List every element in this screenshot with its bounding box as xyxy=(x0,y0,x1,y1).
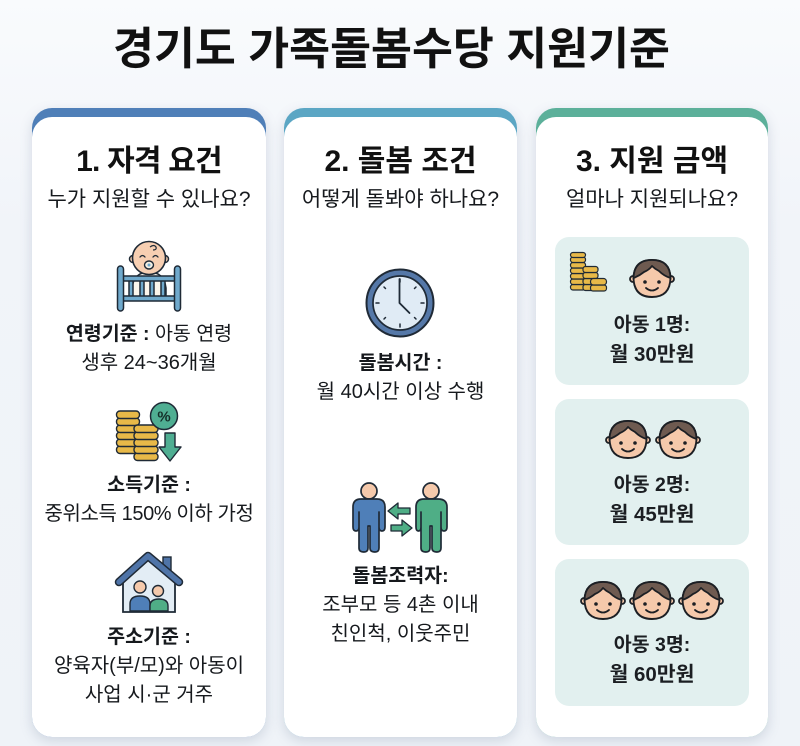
text: three children amount: 월 60만원 xyxy=(609,663,695,686)
icon: coin stacks xyxy=(570,252,608,292)
text: residence criterion: 사업 시·군 거주 xyxy=(85,684,213,706)
text: care hours: 월 40시간 이상 수행 xyxy=(317,381,484,403)
text: care helper: 친인척, 이웃주민 xyxy=(331,623,470,645)
text: three children amount: 아동 3명: xyxy=(614,634,690,656)
text: income criterion: 중위소득 150% 이하 가정 xyxy=(44,503,254,525)
text: care helper: 돌봄조력자: xyxy=(352,565,449,587)
icon: coins and percent down xyxy=(116,402,182,462)
text: residence criterion: 주소기준 : xyxy=(107,626,191,648)
icon: child face xyxy=(629,259,675,298)
text: two children amount: 월 45만원 xyxy=(609,503,695,526)
card: two children xyxy=(555,399,749,545)
panel: 1. eligibility xyxy=(32,108,266,737)
icon: baby in crib xyxy=(116,240,182,312)
heading: care conditions: 2. 돌봄 조건 xyxy=(324,145,477,178)
icons: three child faces xyxy=(580,581,724,620)
title: 경기도 가족돌봄수당 지원기준 xyxy=(113,25,670,74)
icon: two people exchanging care xyxy=(352,482,448,553)
text: age criterion: 생후 24~36개월 xyxy=(81,352,217,374)
text: one child amount xyxy=(609,314,695,366)
text: two children amount: 아동 2명: xyxy=(614,474,690,496)
icons: two child faces xyxy=(605,420,701,459)
text: two children amount xyxy=(609,474,695,526)
text: care helper xyxy=(322,565,479,645)
icon: house with family xyxy=(114,552,184,613)
panel: 3. support amount xyxy=(536,108,768,737)
text: income criterion xyxy=(44,474,254,525)
subheading: amount question: 얼마나 지원되나요? xyxy=(566,188,738,211)
subheading: care question: 어떻게 돌봐야 하나요? xyxy=(302,188,499,211)
subheading: eligibility question: 누가 지원할 수 있나요? xyxy=(47,188,251,211)
text: care helper: 조부모 등 4촌 이내 xyxy=(322,594,479,616)
text: income criterion: 소득기준 : xyxy=(107,474,191,496)
card: three children xyxy=(555,559,749,706)
text: residence criterion: 양육자(부/모)와 아동이 xyxy=(54,655,244,677)
text: residence criterion xyxy=(54,626,244,706)
icon: clock xyxy=(366,268,434,338)
text: age criterion xyxy=(66,323,232,374)
card: one child xyxy=(555,237,749,385)
text: care hours xyxy=(317,352,484,403)
panel: 2. care conditions xyxy=(284,108,517,737)
icon: coins and percent down: % xyxy=(157,408,171,426)
text: one child amount: 월 30만원 xyxy=(609,343,695,366)
text: age criterion: 연령기준 : 아동 연령 xyxy=(66,323,232,345)
text: three children amount xyxy=(609,634,695,686)
heading: support amount: 3. 지원 금액 xyxy=(576,145,728,178)
heading: eligibility: 1. 자격 요건 xyxy=(76,145,222,178)
text: one child amount: 아동 1명: xyxy=(614,314,690,336)
text: care hours: 돌봄시간 : xyxy=(359,352,442,374)
